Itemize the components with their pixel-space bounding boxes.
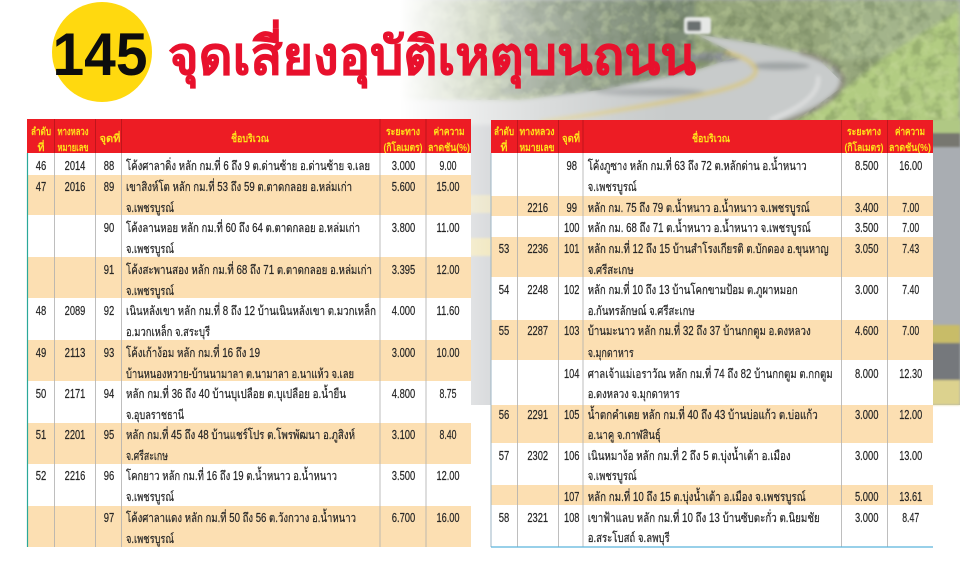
row 97: 97 bbox=[104, 511, 114, 525]
row 96: 52 bbox=[36, 469, 46, 483]
row 107: 107 bbox=[564, 490, 579, 504]
right table header: ระยะทาง bbox=[847, 126, 881, 138]
row 91: 3.395 bbox=[392, 263, 415, 277]
row 105: 56 bbox=[499, 408, 509, 422]
row 108 bbox=[499, 509, 919, 546]
row 106 bbox=[499, 446, 922, 484]
badge: 145 in yellow circle bbox=[52, 2, 152, 102]
row 98: โค้งภูซาง หลัก กม.ที่ 63 ถึง 72 ต.หลักด่าน อ.น้ำหนาว bbox=[588, 156, 807, 174]
row 88: 9.00 bbox=[440, 159, 457, 173]
row 96 bbox=[36, 466, 460, 505]
row 108: 3.000 bbox=[855, 511, 878, 525]
row 96: จ.เพชรบูรณ์ bbox=[126, 490, 174, 505]
row 94: 94 bbox=[104, 387, 114, 401]
row 88: 3.000 bbox=[392, 159, 415, 173]
row 96: โคกยาว หลัก กม.ที่ 16 ถึง 19 ต.น้ำหนาว อ.น้ำหนาว bbox=[126, 466, 337, 483]
right table header: หมายเลข bbox=[520, 142, 554, 154]
row 108: เขาฟ้าแลบ หลัก กม.ที่ 10 ถึง 13 บ้านซับตะกั่ว ต.นิยมชัย bbox=[588, 509, 820, 525]
row 93 bbox=[27, 340, 471, 381]
row 103: 7.00 bbox=[902, 324, 919, 338]
row 105: 3.000 bbox=[855, 408, 878, 422]
left table header: ทางหลวง bbox=[58, 126, 88, 138]
row 96: 12.00 bbox=[436, 469, 460, 483]
row 98 bbox=[566, 156, 922, 195]
row 92: 11.60 bbox=[436, 304, 460, 318]
right table header bbox=[491, 120, 933, 154]
row 90: จ.เพชรบูรณ์ bbox=[126, 242, 174, 257]
row 101: 101 bbox=[564, 242, 579, 256]
row 95: 51 bbox=[36, 428, 46, 442]
row 105: อ.นาคู จ.กาฬสินธุ์ bbox=[588, 428, 661, 443]
row 89 bbox=[27, 175, 471, 216]
badge: 145 in yellow circle: 145 bbox=[52, 21, 148, 88]
row 92 bbox=[36, 302, 460, 340]
row 88: 46 bbox=[36, 159, 46, 173]
row 90: โค้งลานหอย หลัก กม.ที่ 60 ถึง 64 ต.ตาดกลอย อ.หล่มเก่า bbox=[126, 219, 360, 235]
row 90: 90 bbox=[104, 221, 114, 235]
row 92: 48 bbox=[36, 304, 46, 318]
row 92: 2089 bbox=[65, 304, 85, 318]
row 102 bbox=[499, 281, 919, 318]
row 105: 12.00 bbox=[899, 408, 922, 422]
row 105: 105 bbox=[564, 408, 579, 422]
right table header: ชื่อบริเวณ bbox=[692, 130, 730, 145]
row 101: 53 bbox=[499, 242, 509, 256]
row 108: 8.47 bbox=[902, 511, 919, 525]
row 102: 2248 bbox=[527, 283, 548, 297]
row 104: 104 bbox=[564, 367, 579, 381]
left table header: จุดที่ bbox=[100, 130, 121, 146]
row 97: จ.เพชรบูรณ์ bbox=[126, 532, 174, 547]
row 92: 4.000 bbox=[392, 304, 415, 318]
row 93: 10.00 bbox=[436, 346, 460, 360]
row 104: ศาลเจ้าแม่เอราวัณ หลัก กม.ที่ 74 ถึง 82 บ้านกกตูม ต.กกตูม bbox=[588, 365, 833, 382]
row 91: 12.00 bbox=[436, 263, 460, 277]
row 100: 7.00 bbox=[902, 221, 919, 235]
left table header: หมายเลข bbox=[58, 142, 88, 154]
left table header: ลาดชัน(%) bbox=[428, 142, 470, 154]
row 89: 89 bbox=[104, 180, 114, 194]
row 89: 15.00 bbox=[436, 180, 460, 194]
row 102: หลัก กม.ที่ 10 ถึง 13 บ้านโคกขามป้อม ต.ภูผาหมอก bbox=[588, 281, 798, 298]
right table header: ค่าความ bbox=[895, 126, 925, 138]
row 101: 2236 bbox=[527, 242, 548, 256]
row 101 bbox=[491, 237, 933, 277]
row 90: 11.00 bbox=[436, 221, 460, 235]
row 94: 4.800 bbox=[392, 387, 415, 401]
row 89: 47 bbox=[36, 180, 46, 194]
row 99: หลัก กม. 75 ถึง 79 ต.น้ำหนาว อ.น้ำหนาว จ.เพชรบูรณ์ bbox=[588, 198, 810, 216]
right table header: จุดที่ bbox=[562, 130, 580, 146]
row 108: อ.สระโบสถ์ จ.ลพบุรี bbox=[588, 530, 670, 546]
row 108: 58 bbox=[499, 511, 509, 525]
row 91: จ.เพชรบูรณ์ bbox=[126, 284, 174, 299]
row 93: บ้านหนองหวาย-บ้านนามาลา ต.นามาลา อ.นาแห้ว จ.เลย bbox=[126, 367, 354, 381]
left table header: (กิโลเมตร) bbox=[384, 141, 422, 154]
row 92: อ.มวกเหล็ก จ.สระบุรี bbox=[126, 324, 210, 340]
row 88: โค้งศาลาดิ่ง หลัก กม.ที่ 6 ถึง 9 ต.ด่านซ้าย อ.ด่านซ้าย จ.เลย bbox=[126, 157, 370, 173]
row 88: 88 bbox=[104, 159, 114, 173]
row 94: 8.75 bbox=[440, 387, 457, 401]
row 106: 57 bbox=[499, 449, 509, 463]
row 88: 2014 bbox=[65, 159, 85, 173]
right table header: ทางหลวง bbox=[520, 126, 554, 138]
row 93: 49 bbox=[36, 346, 46, 360]
row 95: หลัก กม.ที่ 45 ถึง 48 บ้านแชร์โปร ต.โพรพัฒนา อ.ภูสิงห์ bbox=[126, 426, 355, 443]
row 102: 54 bbox=[499, 283, 509, 297]
row 99: 2216 bbox=[527, 201, 548, 215]
row 98: จ.เพชรบูรณ์ bbox=[588, 180, 637, 195]
row 106: 2302 bbox=[527, 449, 548, 463]
row 98: 98 bbox=[566, 159, 577, 173]
row 103: 103 bbox=[564, 324, 579, 338]
row 93: โค้งเก้าง้อม หลัก กม.ที่ 16 ถึง 19 bbox=[126, 344, 260, 360]
row 103 bbox=[491, 320, 933, 361]
row 99: 7.00 bbox=[902, 201, 919, 215]
row 100 bbox=[564, 218, 919, 236]
row 95 bbox=[27, 423, 471, 464]
row 100: 100 bbox=[564, 221, 579, 235]
right table header: ลำดับ bbox=[494, 126, 514, 138]
row 94: 2171 bbox=[65, 387, 85, 401]
row 108: 2321 bbox=[527, 511, 548, 525]
row 104: อ.ดงหลวง จ.มุกดาหาร bbox=[588, 387, 680, 402]
right table header: ที่ bbox=[500, 139, 508, 154]
row 95: 95 bbox=[104, 428, 114, 442]
row 107: 5.000 bbox=[855, 490, 878, 504]
row 104: 12.30 bbox=[899, 367, 922, 381]
row 101: หลัก กม.ที่ 12 ถึง 15 บ้านสำโรงเกียรติ ต.บักดอง อ.ขุนหาญ bbox=[588, 240, 829, 257]
row 103: 4.600 bbox=[855, 324, 878, 338]
row 104: 8.000 bbox=[855, 367, 878, 381]
row 100: หลัก กม. 68 ถึง 71 ต.น้ำหนาว อ.น้ำหนาว จ.เพชรบูรณ์ bbox=[588, 218, 811, 236]
left table header bbox=[27, 119, 471, 154]
row 94: 50 bbox=[36, 387, 46, 401]
row 99 bbox=[491, 196, 933, 216]
row 106: 13.00 bbox=[899, 449, 922, 463]
right table header: ลาดชัน(%) bbox=[889, 142, 931, 154]
icon: car on the road bbox=[684, 17, 711, 34]
row 106: เนินหมาง้อ หลัก กม.ที่ 2 ถึง 5 ต.บุ่งน้ำเต้า อ.เมือง bbox=[588, 446, 791, 464]
row 92: เนินหลังเขา หลัก กม.ที่ 8 ถึง 12 บ้านเนินหลังเขา ต.มวกเหล็ก bbox=[126, 302, 376, 318]
row 95: จ.ศรีสะเกษ bbox=[126, 449, 168, 463]
row 94: จ.อุบลราชธานี bbox=[126, 408, 184, 423]
row 90: 3.800 bbox=[392, 221, 415, 235]
row 99: 3.400 bbox=[855, 201, 878, 215]
row 97: 6.700 bbox=[392, 511, 415, 525]
row 89: เขาสิงห์โต หลัก กม.ที่ 53 ถึง 59 ต.ตาดกลอย อ.หล่มเก่า bbox=[126, 178, 352, 194]
row 103: 55 bbox=[499, 324, 509, 338]
row 93: 3.000 bbox=[392, 346, 415, 360]
row 95: 3.100 bbox=[392, 428, 415, 442]
row 97: 16.00 bbox=[436, 511, 460, 525]
row 96: 96 bbox=[104, 469, 114, 483]
row 107: 13.61 bbox=[899, 490, 922, 504]
left table header: ค่าความ bbox=[434, 126, 465, 138]
row 104 bbox=[564, 365, 922, 402]
row 96: 2216 bbox=[65, 469, 85, 483]
row 101: 3.050 bbox=[855, 242, 878, 256]
row 94: หลัก กม.ที่ 36 ถึง 40 บ้านบุเปลือย ต.บุเปลือย อ.น้ำยืน bbox=[126, 384, 346, 402]
row 103: จ.มุกดาหาร bbox=[588, 346, 634, 361]
left table header: ชื่อบริเวณ bbox=[231, 130, 269, 145]
row 98: 8.500 bbox=[855, 159, 878, 173]
row 102: 7.40 bbox=[902, 283, 919, 297]
row 100: 3.500 bbox=[855, 221, 878, 235]
row 95: 8.40 bbox=[440, 428, 457, 442]
row 92: 92 bbox=[104, 304, 114, 318]
row 105: น้ำตกคำเตย หลัก กม.ที่ 40 ถึง 43 บ้านบ่อแก้ว ต.บ่อแก้ว bbox=[588, 405, 818, 422]
row 108: 108 bbox=[564, 511, 579, 525]
panel: right table bbox=[491, 120, 933, 547]
row 91: โค้งสะพานสอง หลัก กม.ที่ 68 ถึง 71 ต.ตาดกลอย อ.หล่มเก่า bbox=[126, 261, 372, 277]
panel: left table bbox=[27, 119, 471, 547]
row 107: หลัก กม.ที่ 10 ถึง 15 ต.บุ่งน้ำเต้า อ.เมือง จ.เพชรบูรณ์ bbox=[588, 487, 806, 505]
row 91: 91 bbox=[104, 263, 114, 277]
row 101: 7.43 bbox=[902, 242, 919, 256]
row 94 bbox=[36, 384, 457, 423]
row 106: จ.เพชรบูรณ์ bbox=[588, 469, 637, 484]
left table header: ที่ bbox=[37, 139, 45, 154]
row 107 bbox=[491, 485, 933, 505]
left table header: ลำดับ bbox=[31, 126, 51, 138]
row 103: บ้านมะนาว หลัก กม.ที่ 32 ถึง 37 บ้านกกตูม อ.ดงหลวง bbox=[588, 322, 811, 339]
row 93: 93 bbox=[104, 346, 114, 360]
row 89: 5.600 bbox=[392, 180, 415, 194]
row 102: อ.กันทรลักษณ์ จ.ศรีสะเกษ bbox=[588, 304, 695, 318]
row 102: 3.000 bbox=[855, 283, 878, 297]
row 103: 2287 bbox=[527, 324, 548, 338]
background photo: curved mountain road bbox=[360, 0, 960, 405]
row 106: 106 bbox=[564, 449, 579, 463]
row 97 bbox=[27, 506, 471, 547]
row 89: 2016 bbox=[65, 180, 85, 194]
row 91 bbox=[27, 257, 471, 299]
left table header: ระยะทาง bbox=[386, 126, 420, 138]
title: จุดเสี่ยงอุบัติเหตุบนถนน bbox=[168, 20, 696, 89]
row 98: 16.00 bbox=[899, 159, 922, 173]
row 89: จ.เพชรบูรณ์ bbox=[126, 201, 174, 216]
row 97: โค้งศาลาแดง หลัก กม.ที่ 50 ถึง 56 ต.วังกวาง อ.น้ำหนาว bbox=[126, 508, 356, 525]
row 102: 102 bbox=[564, 283, 579, 297]
right table header: (กิโลเมตร) bbox=[844, 141, 884, 154]
row 95: 2201 bbox=[65, 428, 85, 442]
row 105: 2291 bbox=[527, 408, 548, 422]
row 90 bbox=[104, 219, 460, 257]
row 88 bbox=[36, 157, 457, 173]
row 96: 3.500 bbox=[392, 469, 415, 483]
row 106: 3.000 bbox=[855, 449, 878, 463]
row 101: จ.ศรีสะเกษ bbox=[588, 263, 634, 277]
row 93: 2113 bbox=[65, 346, 85, 360]
row 105 bbox=[491, 405, 933, 443]
row 99: 99 bbox=[566, 201, 577, 215]
